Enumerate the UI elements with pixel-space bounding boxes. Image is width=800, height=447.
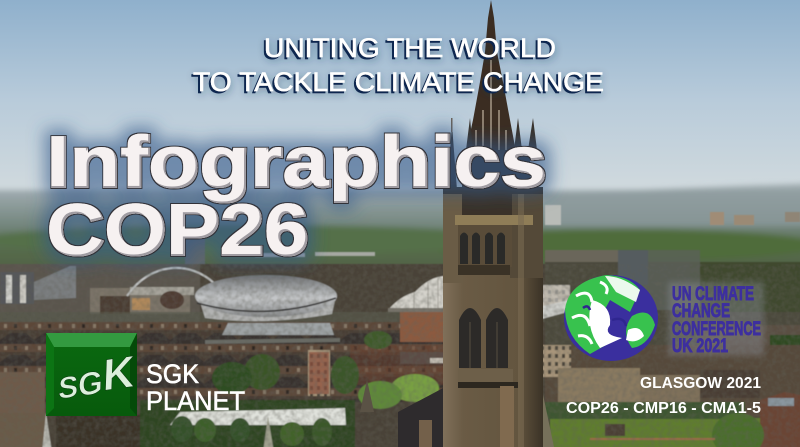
conference name: UK 2021 [672,336,728,357]
icon: university tower [443,0,543,447]
trees and lawns [140,331,764,447]
subtitle heading [193,33,604,97]
conference name: UN CLIMATE [672,284,754,305]
main title: COP26 [47,191,309,271]
subtitle heading: TO TACKLE CLIMATE CHANGE [193,67,604,97]
main title [47,123,547,271]
conference name [668,282,764,357]
logo: SGK green cube: SG [58,364,103,406]
dome arena [127,268,337,321]
event details [566,375,761,417]
foreground roof and turrets [360,380,554,447]
brand name: PLANET [146,386,245,416]
logo: SGK green cube: K [102,347,135,401]
subtitle heading: UNITING THE WORLD [264,33,556,63]
icon: COP26 globe [564,275,658,361]
brand name: SGK [146,359,199,389]
event details: GLASGOW 2021 [640,375,761,392]
logo: SGK green cube [46,333,137,416]
sky background [0,0,800,200]
brand name [146,359,245,416]
conference name: CHANGE [672,301,730,322]
main title: Infographics [47,123,547,203]
armadillo auditorium [388,276,446,312]
event details: COP26 - CMP16 - CMA1-5 [566,400,761,417]
distant hills [0,183,800,275]
city panorama [0,205,800,447]
